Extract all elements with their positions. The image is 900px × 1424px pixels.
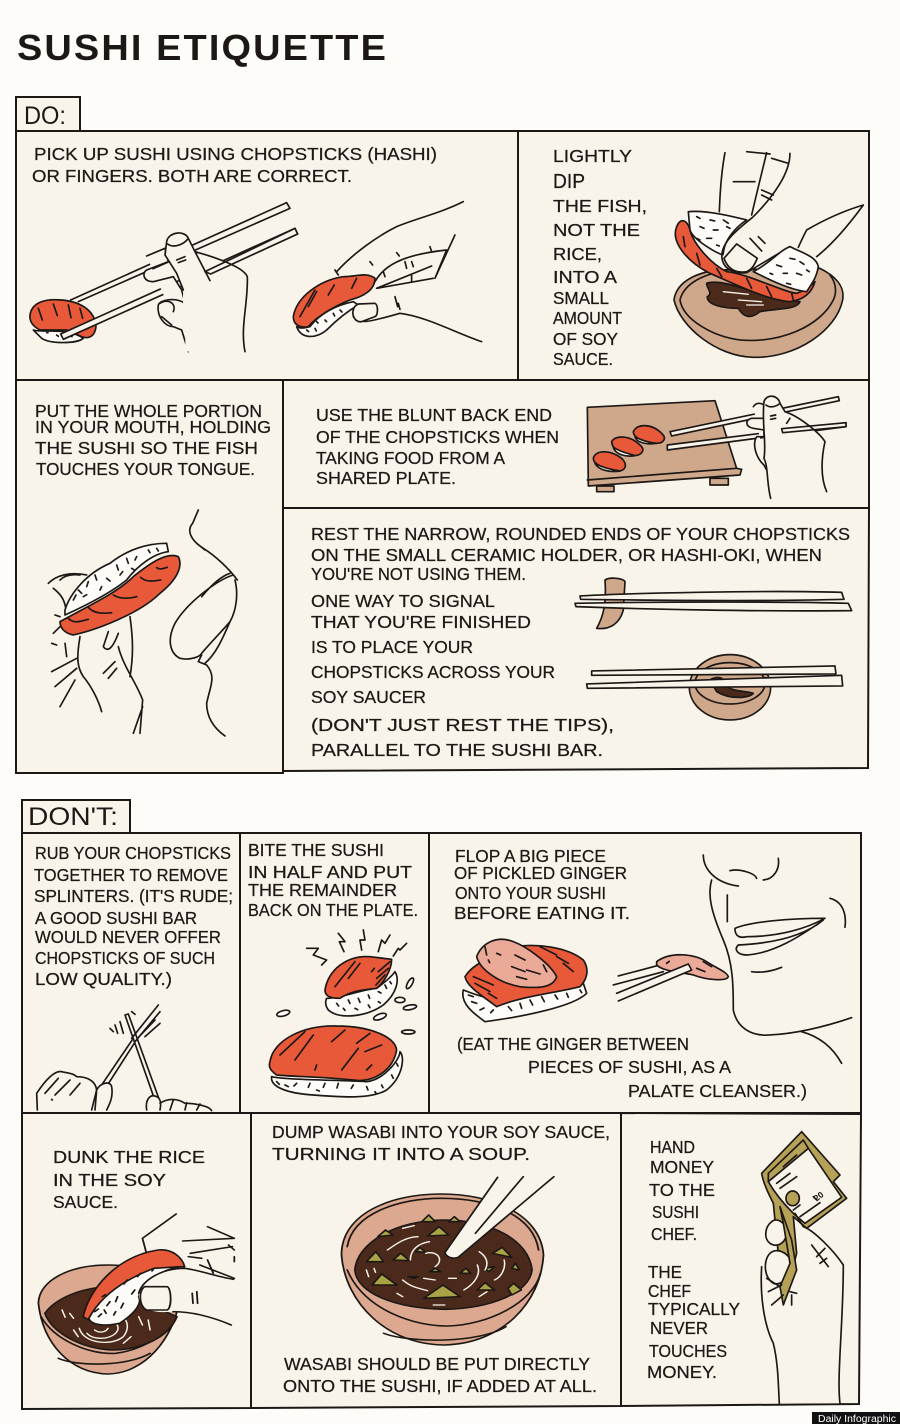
illustration: hand with money: 20	[812, 1189, 826, 1203]
text: rub chopsticks: A GOOD SUSHI BAR	[35, 908, 197, 928]
label: do	[16, 97, 80, 131]
text: bite in half: BITE THE SUSHI	[248, 840, 384, 860]
illustration: dipping fish in soy dish	[674, 152, 863, 357]
text: rest chopsticks: IS TO PLACE YOUR	[311, 637, 473, 657]
text: flop ginger: (EAT THE GINGER BETWEEN	[457, 1034, 689, 1054]
text: lightly dip: SMALL	[553, 288, 609, 308]
text: rest chopsticks: YOU'RE NOT USING THEM.	[311, 564, 526, 584]
illustration: ginger on chopsticks	[613, 955, 728, 1001]
illustration: sushi to mouth	[48, 510, 237, 736]
text: whole portion: PUT THE WHOLE PORTION	[35, 401, 262, 421]
text: rub chopsticks	[34, 843, 233, 989]
illustration: chopsticks on holder	[575, 578, 852, 629]
text: lightly dip: LIGHTLY	[553, 146, 632, 166]
illustration: rubbing chopsticks	[37, 1005, 212, 1111]
text: dunk rice: SAUCE.	[53, 1192, 118, 1212]
illustration: wasabi soy soup	[341, 1177, 554, 1345]
text: blunt back end: TAKING FOOD FROM A	[316, 448, 505, 468]
text: blunt back end: USE THE BLUNT BACK END	[316, 405, 552, 425]
text: lightly dip: DIP	[553, 171, 585, 193]
text: blunt back end: SHARED PLATE.	[316, 468, 456, 488]
text: dump wasabi	[272, 1122, 610, 1396]
text: hand money: TO THE	[649, 1180, 715, 1200]
illustration: sushi with ginger	[463, 939, 587, 1022]
text: rub chopsticks: WOULD NEVER OFFER	[35, 927, 221, 947]
panel: pick up sushi	[16, 131, 518, 380]
text: hand money: SUSHI	[652, 1202, 699, 1222]
text: blunt back end	[316, 405, 559, 488]
text: flop ginger: PALATE CLEANSER.)	[628, 1081, 807, 1101]
text: lightly dip: THE FISH,	[553, 196, 647, 216]
panel: rub chopsticks	[22, 833, 240, 1113]
text: lightly dip: RICE,	[553, 244, 602, 264]
text: bite in half	[248, 840, 418, 920]
text: flop ginger: FLOP A BIG PIECE	[455, 846, 606, 866]
label: don't: DON'T:	[28, 803, 118, 831]
text: pick up sushi	[32, 144, 437, 186]
text: flop ginger: ONTO YOUR SUSHI	[455, 883, 606, 903]
panel: whole portion	[16, 380, 283, 773]
text: hand money: HAND	[650, 1137, 695, 1157]
text: dump wasabi: TURNING IT INTO A SOUP.	[272, 1144, 530, 1164]
text: bite in half: IN HALF AND PUT	[248, 862, 412, 882]
text: hand money: MONEY.	[647, 1362, 717, 1382]
illustration: bitten sushi and whole sushi	[269, 930, 417, 1097]
label: don't	[22, 800, 130, 833]
text: dunk rice: DUNK THE RICE	[53, 1147, 205, 1167]
text: dunk rice	[53, 1147, 205, 1212]
text: whole portion	[35, 401, 271, 479]
illustration: board and chopsticks	[587, 396, 846, 498]
text: rub chopsticks: CHOPSTICKS OF SUCH	[35, 948, 215, 968]
illustration: sushi held with fingers	[293, 202, 482, 342]
illustration: face	[703, 855, 852, 1063]
text: rub chopsticks: LOW QUALITY.)	[35, 969, 172, 989]
text: hand money: THE	[648, 1262, 682, 1282]
text: hand money: MONEY	[650, 1157, 714, 1177]
text: bite in half: THE REMAINDER	[248, 880, 397, 900]
text: hand money: CHEF.	[651, 1224, 697, 1244]
panel: bite in half	[240, 833, 429, 1113]
text: dunk rice: IN THE SOY	[53, 1170, 166, 1190]
text: rest chopsticks: THAT YOU'RE FINISHED	[311, 612, 531, 632]
text: rest chopsticks: SOY SAUCER	[311, 687, 426, 707]
text: rub chopsticks: SPLINTERS. (IT'S RUDE;	[34, 886, 233, 906]
panel: dump wasabi	[251, 1113, 621, 1408]
text: flop ginger: BEFORE EATING IT.	[454, 903, 630, 923]
panel: hand money	[621, 1113, 861, 1406]
text: lightly dip: INTO A	[553, 267, 617, 287]
text: rest chopsticks: ONE WAY TO SIGNAL	[311, 591, 495, 611]
panel: rest chopsticks	[283, 508, 869, 771]
panel: flop ginger	[429, 833, 861, 1113]
text: whole portion: TOUCHES YOUR TONGUE.	[36, 459, 255, 479]
text: rest chopsticks: (DON'T JUST REST THE TIPS),	[311, 715, 614, 735]
text: rest chopsticks: PARALLEL TO THE SUSHI BAR.	[311, 740, 603, 760]
text: lightly dip: NOT THE	[553, 220, 640, 240]
text: rest chopsticks: REST THE NARROW, ROUNDED ENDS OF YOUR CHOPSTICKS	[311, 524, 850, 544]
text: pick up sushi: PICK UP SUSHI USING CHOPSTICKS (HASHI)	[34, 144, 437, 164]
text: lightly dip: AMOUNT	[553, 308, 622, 328]
illustration: rice dunked in soy bowl	[38, 1214, 234, 1374]
text: dump wasabi: WASABI SHOULD BE PUT DIRECTLY	[284, 1354, 590, 1374]
panel: blunt back end	[283, 380, 869, 508]
text: whole portion: IN YOUR MOUTH, HOLDING	[35, 417, 271, 437]
text: hand money: TYPICALLY	[648, 1299, 740, 1319]
text: blunt back end: OF THE CHOPSTICKS WHEN	[316, 427, 559, 447]
section: don't	[22, 800, 861, 1409]
text: rest chopsticks: ON THE SMALL CERAMIC HOLDER, OR HASHI-OKI, WHEN	[311, 545, 822, 565]
text: flop ginger: PIECES OF SUSHI, AS A	[528, 1057, 731, 1077]
text: rest chopsticks: CHOPSTICKS ACROSS YOUR	[311, 662, 555, 682]
title: SUSHI ETIQUETTE	[17, 27, 388, 68]
text: flop ginger	[454, 846, 807, 1101]
illustration: hand with money	[761, 1132, 847, 1403]
panel: dunk rice	[22, 1113, 251, 1409]
text: hand money	[647, 1137, 740, 1382]
text: hand money: NEVER	[650, 1318, 708, 1338]
text: hand money: TOUCHES	[649, 1341, 727, 1361]
text: dump wasabi: ONTO THE SUSHI, IF ADDED AT ALL.	[283, 1376, 597, 1396]
text: rest chopsticks	[311, 524, 850, 760]
text: lightly dip	[553, 146, 647, 369]
text: whole portion: THE SUSHI SO THE FISH	[35, 438, 258, 458]
text: lightly dip: OF SOY	[553, 329, 618, 349]
text: lightly dip: SAUCE.	[553, 349, 613, 369]
text: bite in half: BACK ON THE PLATE.	[248, 900, 418, 920]
text: rub chopsticks: TOGETHER TO REMOVE	[34, 865, 228, 885]
illustration: sushi held with chopsticks	[30, 203, 298, 352]
illustration: chopsticks across saucer	[587, 655, 843, 720]
label: do: DO:	[24, 102, 66, 130]
text: pick up sushi: OR FINGERS. BOTH ARE CORRECT.	[32, 166, 352, 186]
text: rub chopsticks: RUB YOUR CHOPSTICKS	[35, 843, 231, 863]
section: do	[16, 97, 869, 773]
text: hand money: CHEF	[648, 1281, 691, 1301]
text: dump wasabi: DUMP WASABI INTO YOUR SOY SAUCE,	[272, 1122, 610, 1142]
text: flop ginger: OF PICKLED GINGER	[454, 863, 627, 883]
panel: lightly dip	[518, 131, 869, 380]
